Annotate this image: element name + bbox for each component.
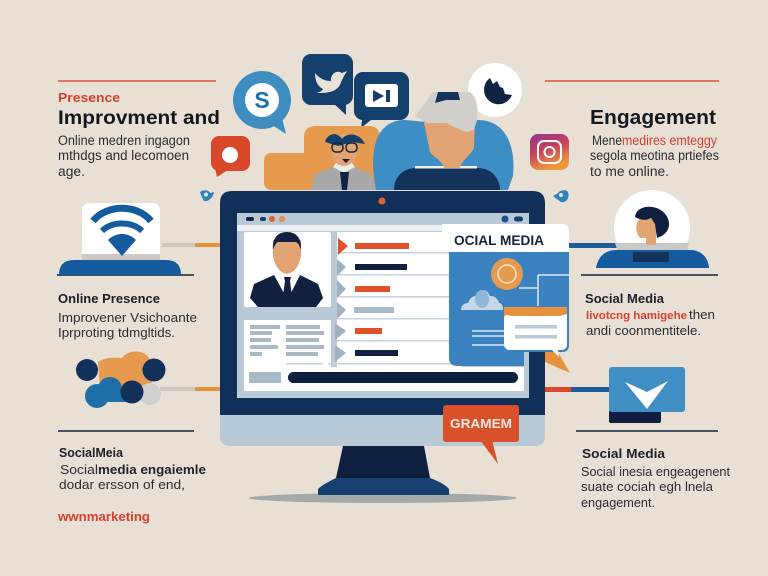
list rows xyxy=(331,232,462,367)
connector: left lower xyxy=(160,387,221,391)
icon: instagram xyxy=(530,134,569,170)
monitor shadow xyxy=(249,493,517,503)
text block: presence heading top left: Improvment and xyxy=(58,107,220,129)
icon: skype speech bubble xyxy=(233,71,291,134)
monitor chin xyxy=(220,415,545,446)
text block: online presence: Online Presence xyxy=(58,292,160,306)
icon: small bird right xyxy=(553,190,569,202)
social media popup panel xyxy=(442,224,570,373)
orange circle icon xyxy=(491,258,523,290)
orange backdrop xyxy=(264,126,380,190)
text block: social media lower left: Social xyxy=(60,462,98,477)
text block: online presence: Iprproting tdmgltids. xyxy=(58,325,175,340)
illustration: two people xyxy=(264,92,513,190)
text block: social media right lower: Social Media xyxy=(582,446,666,461)
text block: presence heading top left: age. xyxy=(58,164,85,179)
text block: social media right lower: engagement. xyxy=(581,495,655,510)
text block: social media right lower: suate cociah egh lnela xyxy=(581,479,714,494)
icon: video speech bubble xyxy=(354,72,409,128)
text block: social media right lower xyxy=(581,446,730,510)
search bar row xyxy=(244,367,524,391)
text block: social media right upper: then xyxy=(689,308,715,322)
text block: engagement heading top right: medires emteggy xyxy=(622,133,717,148)
text block: online presence: Improvener Vsichoante xyxy=(58,310,197,325)
text block: presence heading top left: mthdgs and lecomoen xyxy=(58,148,189,163)
text block: social media right upper: livotcng hamigehe xyxy=(586,310,687,322)
icon: small bird left xyxy=(200,190,214,201)
text block: engagement heading top right: segola meotina prtiefes xyxy=(590,148,719,163)
icon: blue message monitor with check xyxy=(609,367,685,423)
text block: social media right lower: Social inesia engeagenent xyxy=(581,464,730,479)
text block: engagement heading top right xyxy=(590,107,719,179)
small message card xyxy=(504,307,567,357)
text block: social media right upper: Social Media xyxy=(585,292,665,306)
small person with glasses xyxy=(311,134,376,190)
text block: engagement heading top right: Engagement xyxy=(590,107,716,129)
cloud icon xyxy=(461,290,503,310)
text block: social media lower left xyxy=(59,446,206,492)
illustration: desktop monitor xyxy=(220,191,545,503)
text block: presence heading top left: Presence xyxy=(58,90,120,105)
icon: red speech bubble xyxy=(211,136,250,177)
webcam dot xyxy=(378,198,386,204)
text block: engagement heading top right: Mene xyxy=(592,133,622,148)
connector: left upper xyxy=(162,243,221,247)
text link: www marketing: wwnmarketing xyxy=(57,510,150,524)
icon: white circle with moon badge xyxy=(468,63,522,117)
connector: right lower xyxy=(545,387,610,392)
callout: GRAMEM speech bubble xyxy=(443,405,519,464)
text block: social media lower left: SocialMeia xyxy=(59,446,124,460)
monitor bezel xyxy=(220,191,545,415)
text block: engagement heading top right: to me online. xyxy=(590,164,669,179)
panel heading: OCIAL MEDIA xyxy=(454,232,544,248)
callout: GRAMEM speech bubble: GRAMEM xyxy=(450,417,512,431)
details card xyxy=(244,320,453,367)
monitor stand xyxy=(318,446,449,495)
text block: presence heading top left: Online medren ingagon xyxy=(58,133,190,148)
screen xyxy=(237,213,529,398)
large person from behind xyxy=(373,92,513,190)
window controls xyxy=(246,216,523,222)
text block: social media lower left: dodar ersson of end, xyxy=(59,477,185,492)
connector: right upper xyxy=(545,243,620,248)
profile card xyxy=(244,232,331,307)
text block: social media right upper: andi coonmentitele. xyxy=(586,324,701,338)
text block: online presence xyxy=(58,292,197,340)
icon: twitter speech bubble xyxy=(302,54,353,115)
icon: person in circle on stand xyxy=(596,190,709,268)
icon: skype speech bubble: S xyxy=(254,87,270,113)
icon: wifi on laptop xyxy=(59,203,181,275)
text block: presence heading top left xyxy=(58,90,220,179)
icon: connected people cluster xyxy=(76,351,166,408)
text block: social media right upper xyxy=(585,292,715,338)
text block: social media lower left: media engaiemle xyxy=(98,462,206,477)
